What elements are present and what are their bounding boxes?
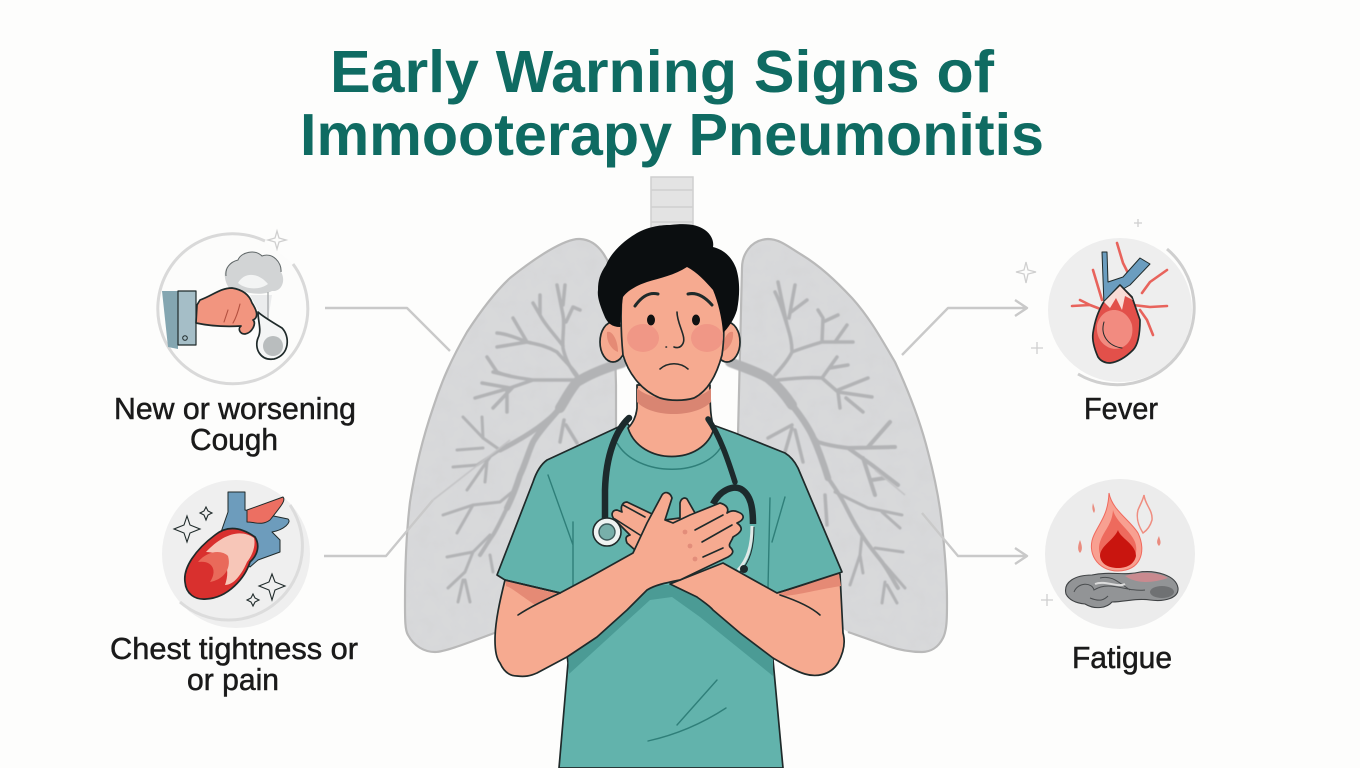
right lung xyxy=(738,239,947,652)
icon circle: chest xyxy=(162,480,310,628)
mouth xyxy=(660,364,688,369)
panel: chest tightness xyxy=(162,480,310,628)
neck xyxy=(628,385,714,456)
icon circle: cough xyxy=(158,234,308,384)
trachea xyxy=(651,177,693,237)
icon: vessels xyxy=(1102,252,1150,305)
connector: chest pain to lung xyxy=(324,500,433,556)
label: chest tightness xyxy=(110,632,358,697)
icon circle: fever xyxy=(1048,238,1192,382)
icon: flame core xyxy=(1100,530,1136,568)
icon: heart xyxy=(185,528,258,599)
hair xyxy=(598,224,739,333)
title: Immooterapy Pneumonitis xyxy=(300,102,1044,168)
icon: vessels xyxy=(220,492,289,567)
collar band xyxy=(617,443,723,469)
face xyxy=(621,262,724,400)
label: fever: Fever xyxy=(1084,392,1158,426)
stethoscope tube xyxy=(605,418,629,518)
stethoscope chest piece xyxy=(593,518,621,546)
icon: rope xyxy=(1066,572,1178,608)
right arm crease xyxy=(780,595,820,615)
neck shadow xyxy=(637,388,711,414)
label: fatigue: Fatigue xyxy=(1072,641,1172,675)
icon: heart highlight xyxy=(1104,286,1133,310)
title: Early Warning Signs of xyxy=(330,39,994,105)
right ear xyxy=(714,322,740,362)
icon: flame xyxy=(1091,493,1142,571)
right arm xyxy=(670,563,844,675)
label: cough: Cough xyxy=(190,423,278,457)
eyes xyxy=(647,314,655,326)
icon: embers xyxy=(1078,503,1161,553)
label: chest tightness: Chest tightness or xyxy=(110,632,358,666)
back hand finger lines xyxy=(615,505,645,535)
nose xyxy=(666,312,684,348)
icon: sparkle xyxy=(1041,594,1053,606)
left ear xyxy=(600,322,626,362)
connector: cough to lung xyxy=(325,308,450,351)
label: chest tightness: or pain xyxy=(187,663,279,697)
left arm and front hand xyxy=(495,493,743,676)
finger lines xyxy=(695,515,732,557)
right sleeve shadow xyxy=(778,574,841,596)
icon: cloud xyxy=(225,252,283,322)
shirt folds xyxy=(548,475,785,741)
sleeve edge xyxy=(505,580,560,593)
panel: fatigue xyxy=(1041,479,1195,629)
eyebrows xyxy=(635,294,712,306)
arrow: lung to fever xyxy=(902,300,1027,355)
title xyxy=(300,39,1044,168)
icon: flame middle xyxy=(1099,510,1136,566)
icon circle: fatigue xyxy=(1045,479,1195,629)
arrow: lung to fatigue xyxy=(922,513,1027,564)
lungs illustration xyxy=(405,239,947,652)
icon: small flame xyxy=(1137,495,1152,533)
icon: veins xyxy=(1072,243,1167,335)
icon: sparkles xyxy=(1016,219,1142,354)
faint line xyxy=(875,470,905,495)
left bronchial tree xyxy=(433,285,622,602)
icon: heart inner xyxy=(1097,310,1132,349)
icon: fist xyxy=(196,288,257,334)
person xyxy=(495,224,844,768)
shirt shadow under arms xyxy=(568,585,773,676)
panel: fever xyxy=(1016,219,1194,385)
label: cough: New or worsening xyxy=(114,392,356,426)
left lung xyxy=(405,239,617,652)
icon: sleeve xyxy=(162,291,196,349)
icon: heart xyxy=(1093,285,1140,363)
arm crease xyxy=(518,593,560,615)
icon: heart contour xyxy=(1103,322,1122,348)
left sleeve shadow xyxy=(506,581,558,605)
faint line xyxy=(433,440,510,500)
panel: cough xyxy=(158,231,308,384)
label: cough xyxy=(114,392,356,457)
back hand xyxy=(612,498,700,552)
icon: sparkles xyxy=(174,507,285,606)
icon: vessel tip xyxy=(247,497,284,523)
icon: droplet xyxy=(257,312,287,359)
icon: sparkle xyxy=(268,231,286,249)
right bronchial tree xyxy=(730,282,905,603)
cheeks xyxy=(627,324,659,352)
hand spots xyxy=(683,530,697,561)
shirt xyxy=(497,423,842,768)
stethoscope headset xyxy=(713,488,754,573)
